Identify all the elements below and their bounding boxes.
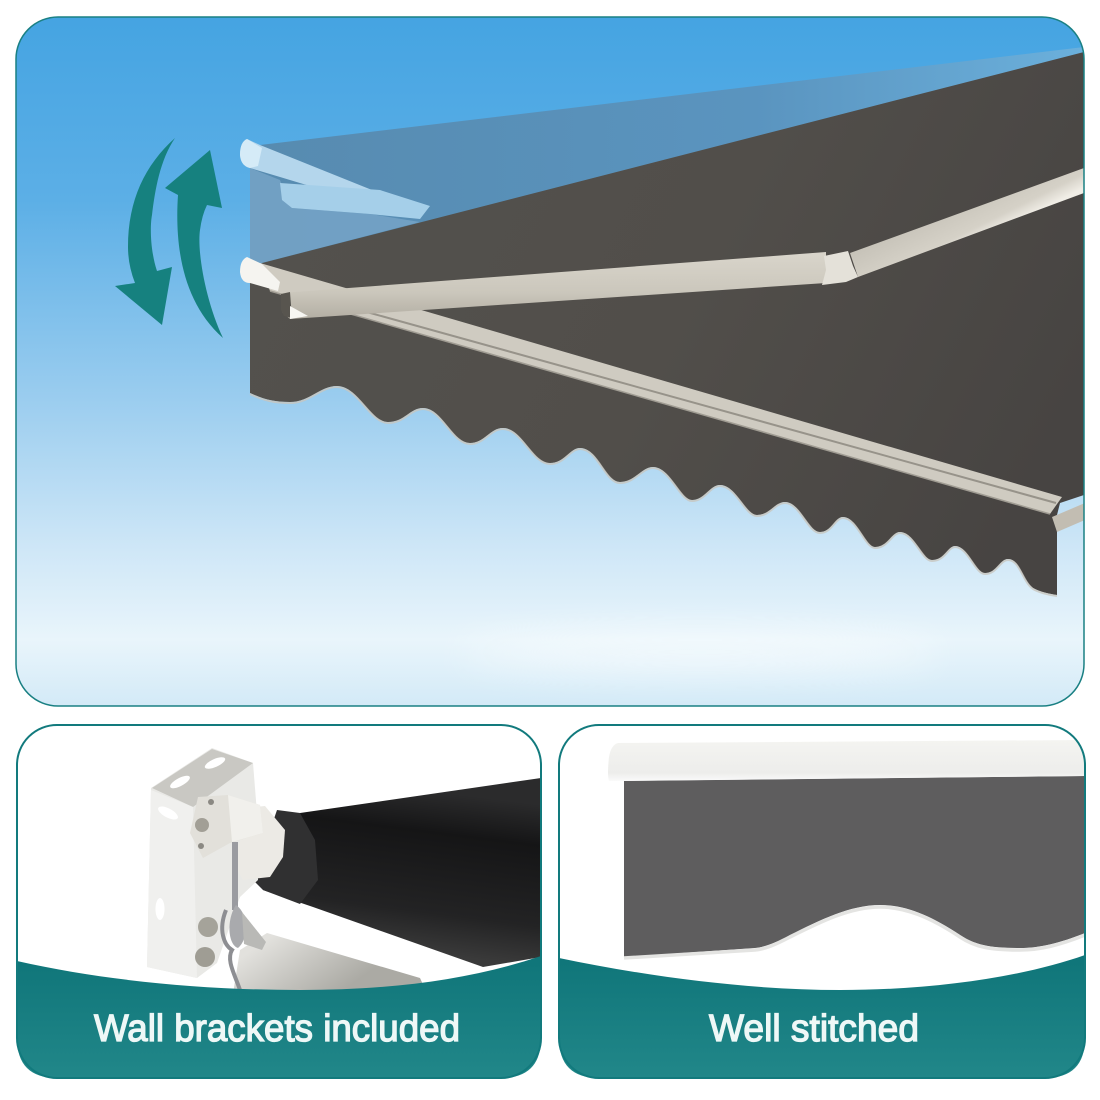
arm joint — [822, 251, 858, 285]
fabric roll end — [253, 810, 318, 904]
arm below fabric — [234, 933, 422, 990]
right rail end bracket — [1052, 503, 1085, 532]
icon: up and down movement arrows — [115, 138, 223, 338]
white top rail — [608, 740, 1085, 781]
panel: wall brackets — [17, 725, 541, 1078]
wall bracket plate — [147, 748, 258, 978]
diagonal front rail — [260, 263, 1062, 514]
ghost raised awning position — [240, 47, 1084, 263]
arm hinge — [281, 292, 292, 318]
grey fabric — [624, 776, 1085, 957]
bracket clamp — [190, 795, 263, 858]
scalloped hem trim — [250, 387, 1057, 596]
upper arm rail — [850, 168, 1084, 277]
hook and bolts — [195, 842, 266, 990]
panel: main awning photo — [16, 17, 1085, 706]
rail end cap — [240, 257, 280, 291]
caption: well stitched: Well stitched — [709, 1008, 919, 1050]
white hem — [624, 907, 1085, 958]
mounting slots — [156, 755, 227, 920]
awning canopy — [250, 52, 1084, 595]
caption band — [559, 955, 1085, 1078]
dark rolled fabric — [263, 778, 541, 967]
lower arm rail — [282, 252, 826, 319]
caption band — [17, 956, 541, 1078]
white roller collar — [257, 806, 285, 878]
caption: wall brackets: Wall brackets included — [94, 1008, 460, 1050]
panel: well stitched — [559, 725, 1085, 1078]
